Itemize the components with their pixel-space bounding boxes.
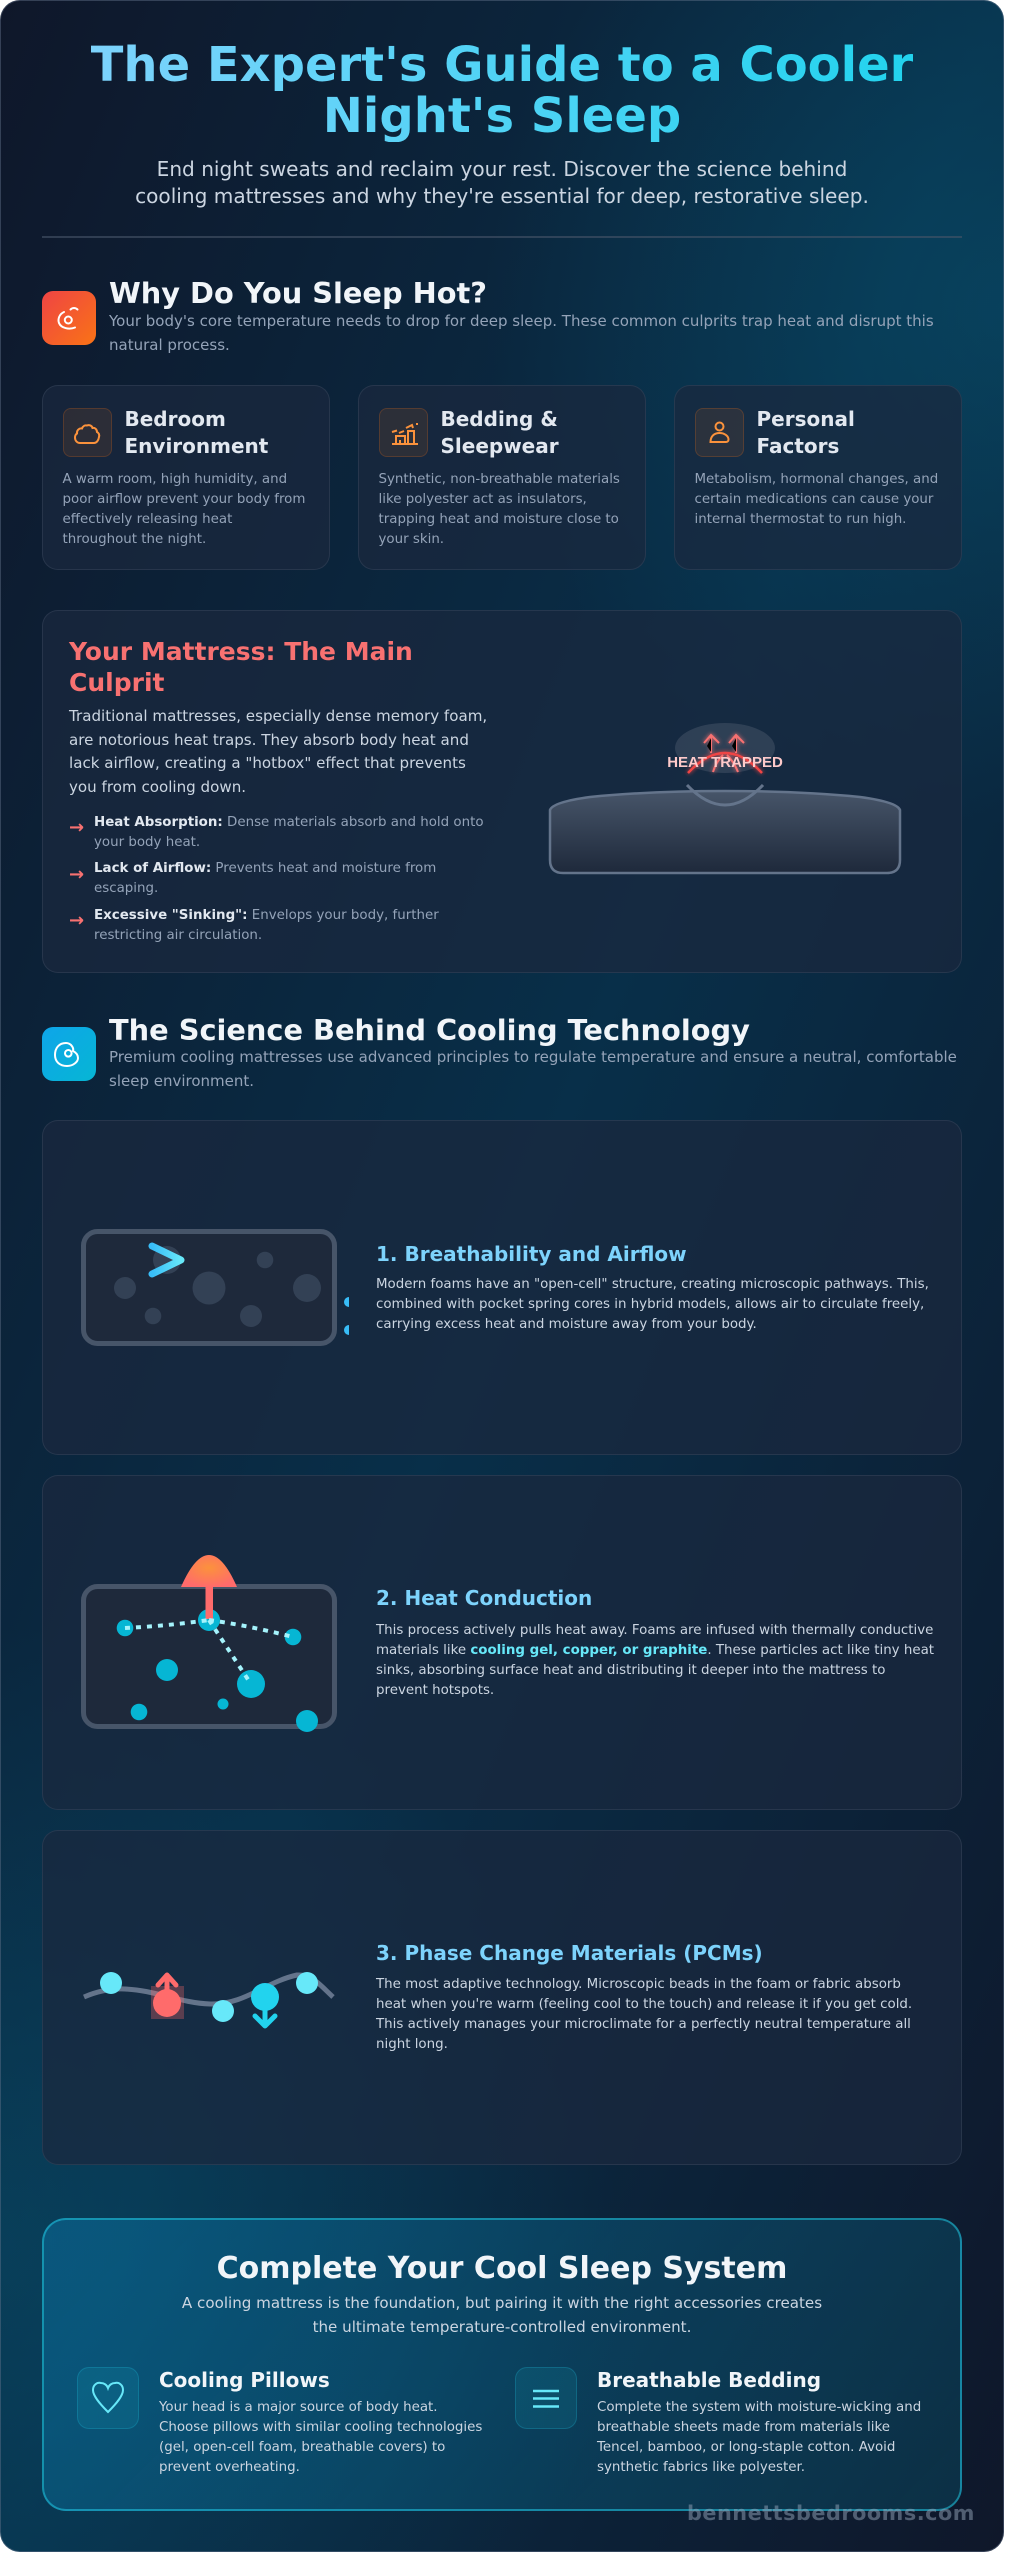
illustration: phase change	[83, 1972, 335, 2028]
card text: Metabolism, hormonal changes, and	[694, 472, 938, 487]
icon: cloud	[63, 408, 112, 457]
text: This actively manages your microclimate for a perfectly neutral temperature all	[376, 2017, 911, 2032]
illustration: heat trapped mattress	[548, 723, 902, 874]
panel paragraph: Traditional mattresses, especially dense memory foam,	[69, 707, 487, 725]
card text: A warm room, high humidity, and	[62, 472, 287, 487]
panel: heat conduction	[42, 1475, 962, 1810]
item text: pillows: (gel, open-cell foam, breathable covers) to	[159, 2440, 445, 2455]
list: sinking	[94, 908, 439, 943]
card title: Factors	[756, 434, 839, 458]
subtitle	[135, 157, 869, 208]
text: The most adaptive technology. Microscopic beads in the foam or fabric absorb	[376, 1977, 901, 1992]
item text: bedding: synthetic fabrics like polyester.	[597, 2460, 805, 2475]
title: Night's Sleep	[323, 88, 681, 144]
panel heading: Your Mattress: The Main	[69, 637, 413, 666]
subtitle: End night sweats and reclaim your rest. Discover the science behind	[157, 157, 847, 181]
panel: personal factors	[674, 385, 962, 570]
card text: internal thermostat to run high.	[694, 512, 906, 527]
subtitle: cooling mattresses and why they're essential for deep, restorative sleep.	[135, 184, 869, 208]
list: heat absorption: Heat Absorption: Dense materials absorb and hold onto	[94, 815, 484, 830]
item text: pillows: Choose pillows with similar cooling technologies	[159, 2420, 482, 2435]
text: sinks, absorbing surface heat and distributing it deeper into the mattress to	[376, 1663, 885, 1678]
heat trapped label: HEAT TRAPPED	[667, 754, 783, 771]
card title	[440, 407, 559, 458]
card text: throughout the night.	[62, 532, 206, 547]
panel heading: Culprit	[69, 668, 164, 697]
text	[376, 1277, 929, 1332]
card text: your skin.	[378, 532, 444, 547]
intro: A cooling mattress is the foundation, but pairing it with the right accessories creates	[182, 2294, 822, 2312]
card title	[124, 407, 268, 458]
card title: Bedding &	[440, 407, 558, 431]
item text: pillows: Your head is a major source of body heat.	[159, 2400, 438, 2415]
card text	[62, 472, 305, 547]
illustration: open-cell foam	[81, 1229, 349, 1346]
item text: pillows: prevent overheating.	[159, 2460, 300, 2475]
panel heading	[68, 637, 413, 697]
icon: cooling swirl	[42, 1027, 96, 1081]
panel paragraph: you from cooling down.	[69, 778, 246, 796]
icon: person	[695, 408, 744, 457]
card text: poor airflow prevent your body from	[62, 492, 305, 507]
item title: bedding: Breathable Bedding	[597, 2368, 821, 2392]
card title: Sleepwear	[440, 434, 559, 458]
panel paragraph	[68, 707, 487, 796]
card title: Bedroom	[124, 407, 226, 431]
list: heat absorption	[94, 815, 484, 850]
section intro: science	[109, 1048, 957, 1090]
text	[376, 1977, 912, 2052]
heading: Complete Your Cool Sleep System	[217, 2251, 787, 2286]
item text: bedding: Tencel, bamboo, or long-staple cotton. Avoid	[597, 2440, 895, 2455]
text	[376, 1623, 934, 1698]
icon: heart	[77, 2367, 139, 2429]
text: This process actively pulls heat away. Foams are infused with thermally conductive	[376, 1623, 933, 1638]
item text: bedding	[596, 2400, 921, 2475]
illustration: heat conduction	[81, 1555, 337, 1732]
section intro: why	[109, 312, 934, 354]
card title: Environment	[124, 434, 268, 458]
card text	[694, 472, 938, 527]
icon: heat swirl	[42, 291, 96, 345]
card text	[378, 472, 620, 547]
text: prevent hotspots.	[376, 1683, 494, 1698]
text: materials like cooling gel, copper, or graphite. These particles act like tiny heat	[376, 1643, 934, 1658]
arrow bullet: →	[69, 817, 84, 838]
text: Modern foams have an "open-cell" structure, creating microscopic pathways. This,	[376, 1277, 929, 1292]
card title: Personal	[756, 407, 855, 431]
panel: breathability	[42, 1120, 962, 1455]
list: lack of airflow	[94, 861, 436, 896]
text: night long.	[376, 2037, 448, 2052]
watermark: bennettsbedrooms.com	[687, 2501, 975, 2525]
card text: Synthetic, non-breathable materials	[378, 472, 620, 487]
heading: why do you sleep hot: Why Do You Sleep Hot?	[109, 276, 487, 310]
title	[91, 37, 913, 144]
arrow bullet: →	[69, 910, 84, 931]
text: carrying excess heat and moisture away from your body.	[376, 1317, 757, 1332]
heading: 1. Breathability and Airflow	[376, 1242, 687, 1266]
list: lack of airflow: escaping.	[94, 881, 158, 896]
item title: pillows: Cooling Pillows	[159, 2368, 330, 2392]
panel: bedroom environment	[42, 385, 330, 570]
panel paragraph: lack airflow, creating a "hotbox" effect that prevents	[69, 754, 466, 772]
icon: lines	[515, 2367, 577, 2429]
panel: complete your cool sleep system	[42, 2218, 962, 2511]
item text: bedding: Complete the system with moisture-wicking and	[597, 2400, 921, 2415]
text: combined with pocket spring cores in hybrid models, allows air to circulate freely,	[376, 1297, 924, 1312]
heading: 2. Heat Conduction	[376, 1586, 592, 1610]
list: sinking: restricting air circulation.	[94, 928, 262, 943]
panel: your mattress	[42, 610, 962, 973]
text: heat when you're warm (feeling cool to the touch) and release it if you get cold.	[376, 1997, 912, 2012]
intro: the ultimate temperature-controlled environment.	[313, 2318, 691, 2336]
section intro: why: natural process.	[109, 336, 230, 354]
item text: bedding: breathable sheets made from materials like	[597, 2420, 890, 2435]
heading: 3. Phase Change Materials (PCMs)	[376, 1941, 763, 1965]
section intro: why: Your body's core temperature needs to drop for deep sleep. These common culprits trap heat and disrupt this	[109, 312, 934, 330]
section intro: science: Premium cooling mattresses use advanced principles to regulate temperature and ensure a neutral, comfortable	[109, 1048, 957, 1066]
panel: phase change materials	[42, 1830, 962, 2165]
card text: like polyester act as insulators,	[378, 492, 587, 507]
icon: bedding	[379, 408, 428, 457]
title: The Expert's Guide to a Cooler	[91, 37, 913, 93]
list: heat absorption: your body heat.	[94, 835, 200, 850]
list: lack of airflow: Lack of Airflow: Prevents heat and moisture from	[94, 861, 436, 876]
card title	[756, 407, 855, 458]
card text: certain medications can cause your	[694, 492, 933, 507]
heading: science: The Science Behind Cooling Technology	[109, 1013, 750, 1047]
card text: trapping heat and moisture close to	[378, 512, 619, 527]
arrow bullet: →	[69, 864, 84, 885]
item text: pillows	[159, 2400, 482, 2475]
section intro: science: sleep environment.	[109, 1072, 254, 1090]
card text: effectively releasing heat	[62, 512, 232, 527]
panel paragraph: are notorious heat traps. They absorb body heat and	[69, 730, 469, 748]
list: sinking: Excessive "Sinking": Envelops your body, further	[94, 908, 439, 923]
panel: bedding and sleepwear	[358, 385, 646, 570]
intro	[182, 2294, 822, 2336]
